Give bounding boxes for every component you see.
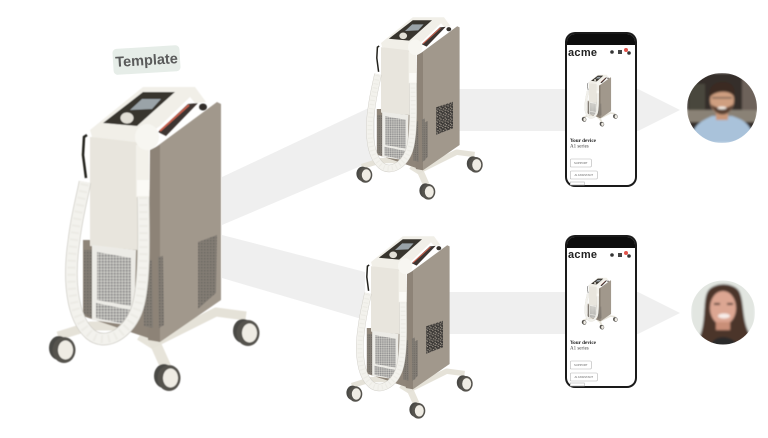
- lower connector band: template to device 2: [222, 235, 365, 320]
- phone 1 brand: acme: [568, 47, 597, 59]
- phone 1 support button: SUPPORT: [574, 161, 588, 165]
- phone 2 device image: [582, 278, 618, 329]
- template label: Template: [115, 51, 178, 71]
- phone 1 assistant button: AI ASSISTANT: [574, 173, 593, 177]
- arrow: device 2 to user 2: [445, 292, 680, 334]
- upper connector band: template to device 1: [222, 105, 375, 225]
- phone 2 brand: acme: [568, 249, 597, 261]
- phone 1 assistant button: [570, 171, 597, 179]
- avatar: woman: [691, 280, 755, 350]
- phone 1 device title: Your device: [570, 138, 597, 144]
- phone 1 icons: [610, 48, 631, 55]
- phone 1 support button: [570, 159, 591, 167]
- device 1 with QR code: [356, 17, 483, 200]
- avatar: man: [687, 73, 758, 143]
- phone 2 assistant button: AI ASSISTANT: [574, 375, 593, 379]
- phone 1 device image: [582, 75, 618, 126]
- phone 2 icons: [610, 251, 631, 258]
- phone 2: [565, 235, 637, 388]
- template label: [112, 45, 181, 75]
- phone 2 device title: Your device: [570, 340, 597, 346]
- phone 2 assistant button: [570, 373, 597, 381]
- phone 2 support button: SUPPORT: [574, 363, 588, 367]
- phone 2 support button: [570, 361, 591, 369]
- phone 1 series: A1 series: [570, 144, 589, 150]
- phone 1: [565, 32, 637, 187]
- phone 2 cut-off button: [570, 383, 584, 386]
- phone 1 cut-off button: [570, 182, 584, 185]
- template device: [49, 87, 260, 391]
- device 2 with QR code: [346, 236, 473, 419]
- phone 2 series: A1 series: [570, 346, 589, 352]
- arrow: device 1 to user 1: [455, 89, 680, 131]
